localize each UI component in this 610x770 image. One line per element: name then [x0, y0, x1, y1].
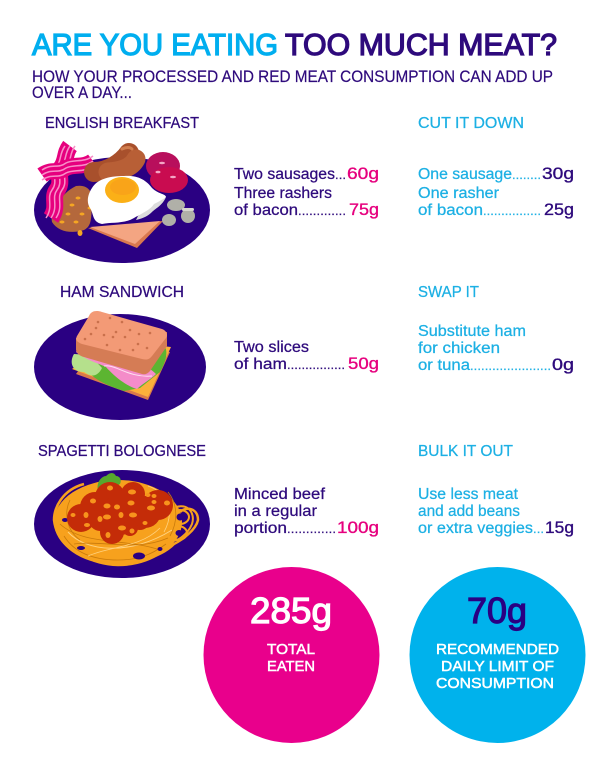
text: cut it down amounts — [418, 164, 574, 219]
beans in sauce — [70, 486, 170, 538]
tomato — [146, 152, 188, 193]
callout: total eaten: 285g — [250, 590, 332, 631]
text: breakfast amounts: ............. — [298, 203, 346, 218]
text: bolognese amounts — [234, 486, 379, 537]
text: ham amounts — [234, 339, 379, 373]
text: cut it down amounts: 30g — [542, 164, 574, 183]
subtitle — [32, 67, 553, 102]
text: swap it amounts: for chicken — [418, 340, 500, 357]
title: ARE YOU EATING — [32, 27, 278, 62]
text: bolognese amounts: in a regular — [234, 503, 317, 520]
text: cut it down amounts: ................ — [483, 203, 541, 218]
subtitle: HOW YOUR PROCESSED AND RED MEAT CONSUMPTION CAN ADD UP — [32, 67, 553, 86]
mushrooms — [162, 199, 195, 226]
bacon — [42, 146, 93, 218]
heading: spagetti bolognese: SPAGETTI BOLOGNESE — [38, 443, 206, 460]
text: breakfast amounts: ... — [335, 167, 346, 182]
sausages — [94, 148, 136, 172]
title — [32, 27, 557, 62]
plate — [34, 470, 210, 578]
beans — [52, 186, 92, 236]
callout: recommended limit: 70g — [467, 590, 527, 631]
text: bolognese amounts: portion — [234, 520, 287, 537]
text: bolognese amounts: 100g — [337, 518, 379, 537]
text: cut it down amounts: of bacon — [418, 202, 483, 219]
illustration: breakfast plate — [34, 146, 210, 263]
pasta — [54, 480, 198, 565]
ham — [76, 347, 156, 389]
sauce — [67, 482, 173, 544]
lettuce — [88, 347, 166, 391]
text: ham amounts: of ham — [234, 356, 287, 373]
text: swap it amounts: Substitute ham — [418, 323, 526, 340]
text: cut it down amounts: ........ — [512, 167, 541, 182]
text: swap it amounts: 0g — [552, 355, 574, 374]
heading: cut it down: CUT IT DOWN — [418, 115, 524, 132]
text: bulk it out amounts: ... — [533, 521, 544, 536]
text: cut it down amounts: 25g — [544, 200, 574, 219]
text: bolognese amounts: Minced beef — [234, 486, 326, 503]
text: bulk it out amounts — [418, 486, 574, 537]
title: TOO MUCH MEAT? — [285, 27, 557, 62]
toast — [88, 221, 163, 248]
text: swap it amounts: or tuna — [418, 357, 470, 374]
text: bulk it out amounts: 15g — [545, 518, 574, 537]
text: bulk it out amounts: and add beans — [418, 503, 520, 520]
text: bulk it out amounts: or extra veggies — [418, 520, 533, 537]
illustration: sandwich plate — [34, 311, 206, 420]
text: breakfast amounts: Two sausages — [234, 166, 335, 183]
text: ham amounts: 50g — [348, 354, 379, 373]
cheese — [72, 340, 171, 397]
callout: total eaten: TOTAL — [267, 641, 315, 658]
callout: recommended limit: DAILY LIMIT OF — [441, 658, 554, 675]
text: breakfast amounts: of bacon — [234, 202, 298, 219]
basil — [98, 473, 121, 494]
text: ham amounts: ................ — [287, 357, 345, 372]
subtitle: OVER A DAY... — [32, 83, 132, 102]
text: breakfast amounts: 60g — [347, 164, 379, 183]
callout: recommended limit: RECOMMENDED — [436, 641, 559, 658]
heading: swap it: SWAP IT — [418, 284, 480, 301]
callout: recommended limit — [410, 567, 586, 743]
callout: total eaten: EATEN — [267, 658, 315, 675]
text: cut it down amounts: One sausage — [418, 166, 512, 183]
text: cut it down amounts: One rasher — [418, 185, 499, 202]
heading: english breakfast: ENGLISH BREAKFAST — [45, 115, 199, 132]
plate — [34, 157, 210, 263]
text: bulk it out amounts: Use less meat — [418, 486, 519, 503]
text: ham amounts: Two slices — [234, 339, 309, 356]
illustration: spaghetti plate — [34, 470, 210, 578]
egg — [88, 176, 166, 224]
heading: bulk it out: BULK IT OUT — [418, 443, 514, 460]
text: breakfast amounts: 75g — [349, 200, 379, 219]
callout: recommended limit: CONSUMPTION — [436, 675, 554, 692]
text: swap it amounts: ...................... — [470, 358, 551, 373]
text: swap it amounts — [418, 323, 574, 374]
bottom bread — [76, 340, 170, 400]
text: bolognese amounts: ............. — [287, 521, 336, 536]
plate — [34, 314, 206, 420]
callout: total eaten — [204, 567, 380, 743]
text: breakfast amounts: Three rashers — [234, 185, 332, 202]
heading: ham sandwich: HAM SANDWICH — [60, 284, 184, 301]
top bread — [76, 311, 167, 374]
text: breakfast amounts — [234, 164, 379, 219]
